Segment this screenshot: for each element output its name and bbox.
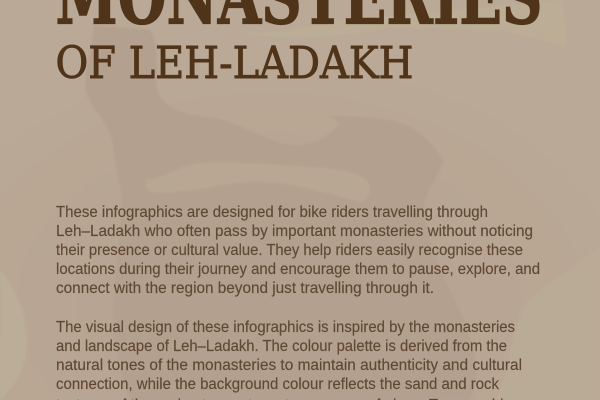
text block: second paragraph: connection, while the background colour reflects the sand and rock (56, 376, 500, 393)
text block: first paragraph: their presence or cultural value. They help riders easily recognise these (56, 242, 523, 259)
text block: first paragraph: locations during their journey and encourage them to pause, explore, and (56, 261, 540, 278)
text block: second paragraph: and landscape of Leh–Ladakh. The colour palette is derived from the (56, 338, 507, 355)
text block: first paragraph: Leh–Ladakh who often pass by important monasteries without noticing (56, 223, 533, 240)
text block: first paragraph: connect with the region beyond just travelling through it. (56, 280, 434, 297)
text block: second paragraph: The visual design of these infographics is inspired by the monasteries (56, 319, 515, 336)
subtitle: OF LEH-LADAKH: OF LEH-LADAKH (56, 38, 414, 89)
text block: second paragraph (56, 319, 522, 400)
text block: second paragraph: natural tones of the monasteries to maintain authenticity and cultural (56, 357, 522, 374)
text block: first paragraph (56, 204, 540, 297)
text block: first paragraph: These infographics are designed for bike riders travelling through (56, 204, 488, 221)
